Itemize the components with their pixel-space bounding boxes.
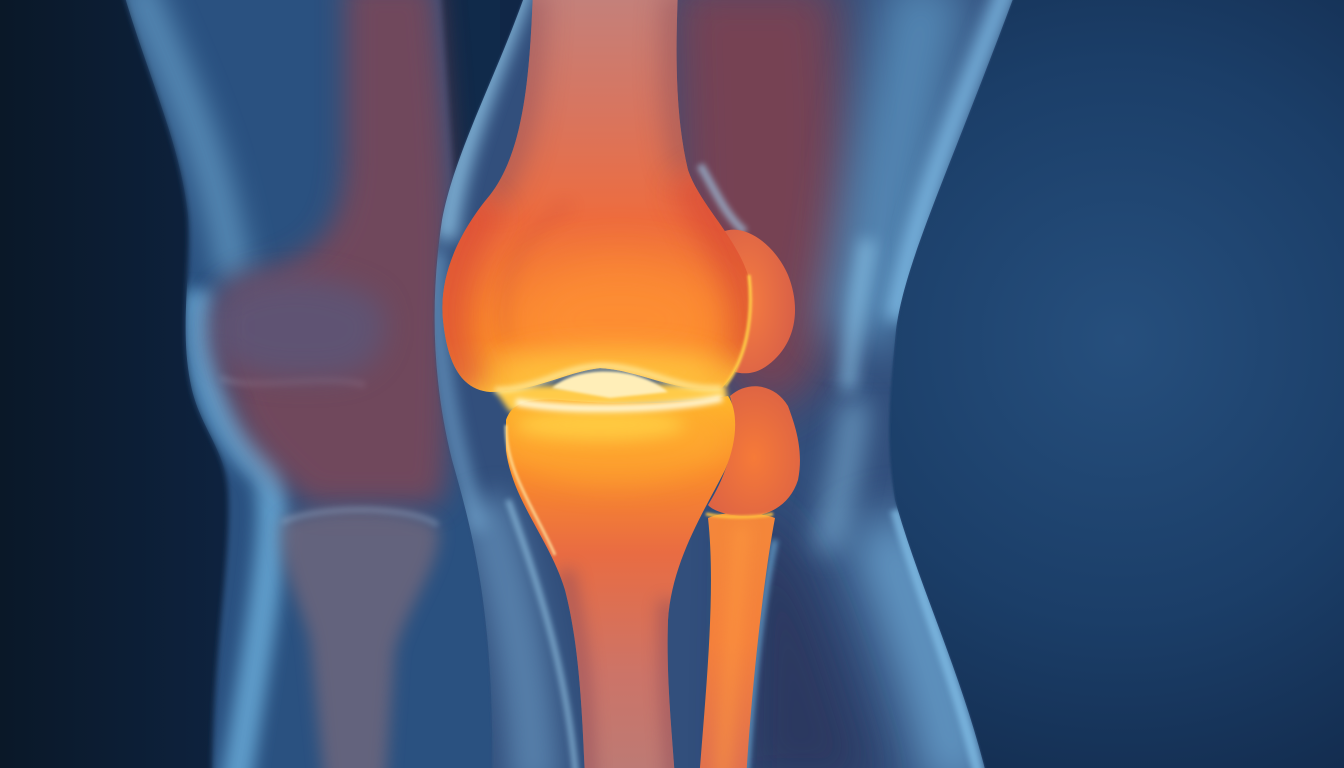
rear femoral condyle (215, 278, 385, 378)
tibia upper glow (506, 419, 718, 490)
shin inner line (508, 500, 577, 768)
femur condyle glow (515, 258, 725, 382)
femur condyle rim shading (445, 175, 748, 392)
front leg silhouette (435, 0, 1020, 768)
femur lower glow (500, 350, 720, 394)
calf right glow (880, 520, 962, 768)
thigh reddish tone (670, 0, 845, 420)
joint line (516, 398, 722, 408)
rear tibia (281, 509, 439, 768)
fibula joint glow (706, 514, 773, 517)
fibula shaft shading (722, 525, 742, 768)
femur shaft side shading (487, 0, 690, 200)
calf left glow (480, 500, 535, 768)
fibula side line (745, 540, 775, 768)
thigh right glow (860, 0, 930, 340)
femur (442, 0, 751, 394)
rear femur (212, 0, 451, 505)
tibia shaft edge shading (565, 570, 675, 768)
tibia (500, 395, 735, 768)
rear tibia rim (282, 510, 438, 525)
thigh right rim (895, 0, 1010, 320)
joint gap fill (492, 384, 728, 412)
calf shadow (740, 500, 880, 768)
rear leg silhouette (120, 0, 510, 768)
calf right rim (895, 510, 982, 768)
fibula head (708, 386, 800, 516)
knee streak lower (826, 400, 855, 550)
femur condyle crease (506, 205, 570, 340)
joint glow (495, 366, 722, 408)
rear leg highlights (135, 0, 451, 768)
meniscus (552, 371, 668, 398)
patella highlight (700, 165, 745, 232)
patella (722, 230, 795, 373)
femur joint line (495, 366, 722, 390)
fibula (699, 386, 800, 768)
fibula shaft (699, 513, 775, 768)
tibia speckle glow (515, 409, 685, 441)
knee left rim (437, 250, 480, 530)
thigh left rim (446, 0, 525, 240)
knee streak upper (848, 240, 868, 390)
tibia left edge highlight (506, 425, 555, 555)
femur edge highlight (725, 275, 750, 386)
